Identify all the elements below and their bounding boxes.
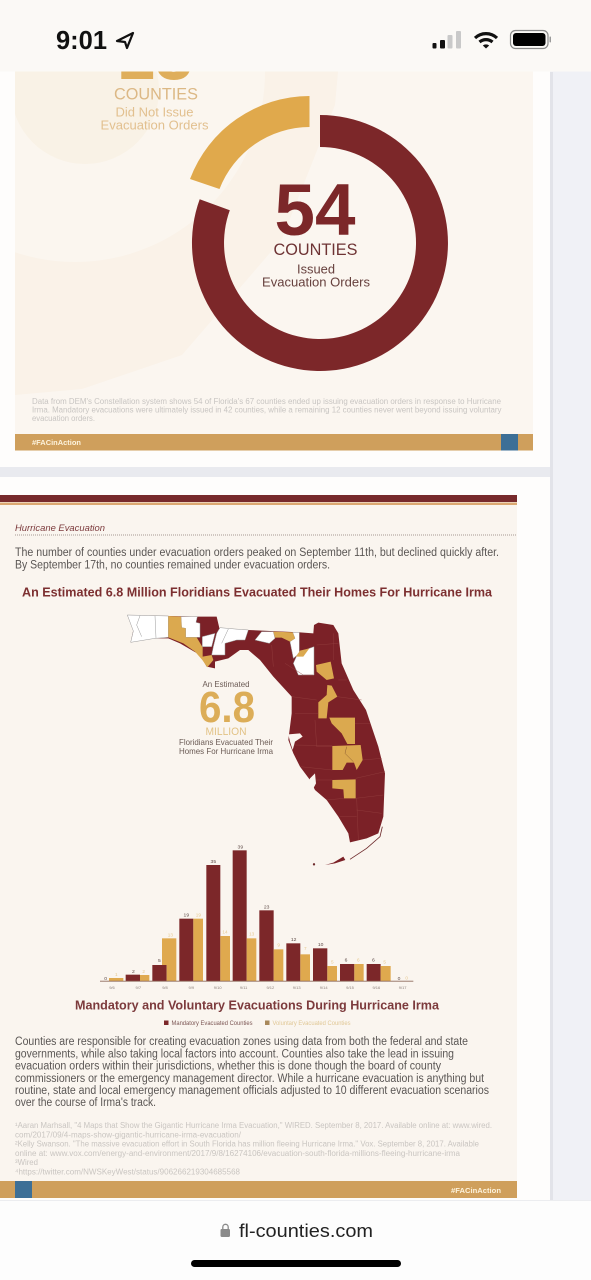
bar chart: evacuated counties by day: 14: [222, 930, 228, 935]
text block: footnotes: com/2017/09/4-maps-show-gigantic-hurricane-irma-evacuation/: [15, 1130, 242, 1140]
bar chart: evacuated counties by day: 39: [238, 844, 243, 850]
statistic: 54 counties issued: Evacuation Orders: [262, 276, 370, 290]
bar chart: evacuated counties by day: 9/16: [372, 985, 381, 990]
callout: 6.8 million evacuated: [179, 679, 273, 756]
chart legend: Voluntary Evacuated Counties: [272, 1021, 350, 1027]
panel: counties issuing evacuation orders: [0, 72, 550, 467]
text block: footnotes: [15, 1121, 492, 1176]
icon: signal bars: [432, 31, 461, 48]
bar chart: evacuated counties by day: 23: [264, 905, 270, 911]
bar chart: evacuated counties by day: 6: [357, 958, 360, 963]
icon: wifi: [475, 34, 497, 48]
heading: chart title: Mandatory and Voluntary Evacuations During Hurricane Irma: [75, 998, 440, 1012]
footer band: #FACinAction: [451, 1186, 501, 1195]
heading: map title: An Estimated 6.8 Million Floridians Evacuated Their Homes For Hurricane Irma: [22, 584, 493, 600]
bar chart: evacuated counties by day: 35: [211, 859, 216, 865]
browser status bar: [0, 0, 591, 72]
bar chart: evacuated counties by day: 1: [115, 972, 118, 977]
footer band: [0, 1181, 517, 1198]
donut segment: 54 counties issued: [192, 115, 448, 371]
bar chart: evacuated counties by day: 13: [168, 932, 173, 937]
bar chart: evacuated counties by day: 7: [304, 946, 307, 951]
text block: footnotes: ²Kelly Swanson. "The massive evacuation effort in South Florida has million fleeing Hurricane Irma." Vox. September 8, 2017. Available: [15, 1140, 480, 1148]
icon: lock: [220, 1224, 230, 1237]
bar chart: evacuated counties by day: 5: [331, 959, 334, 964]
bar chart: evacuated counties by day: 19: [184, 912, 189, 918]
icon: battery: [510, 30, 551, 48]
text block: data note: evacuation orders.: [32, 414, 95, 423]
bar chart: evacuated counties by day: 9/6: [109, 985, 116, 990]
bar chart: evacuated counties by day: 9/17: [399, 985, 407, 990]
statistic: 13 counties did not issue: [100, 14, 208, 132]
bar chart: evacuated counties by day: 9/9: [189, 985, 195, 990]
text block: county responsibilities: evacuation orders within their jurisdictions, whether this is done though the board of county: [15, 1060, 441, 1072]
callout: 6.8 million evacuated: An Estimated: [202, 679, 250, 689]
browser address bar: [0, 1200, 591, 1280]
clock: 9:01: [56, 25, 107, 55]
text block: data note: [32, 397, 502, 423]
text block: footnotes: ¹Aaran Marhsall, "4 Maps that Show the Gigantic Hurricane Irma Evacuation," WIRED. September 8, 2017. Available online at: www.wired.: [15, 1121, 492, 1130]
callout: 6.8 million evacuated: 6.8: [199, 683, 255, 732]
site address: fl-counties.com: [239, 1221, 373, 1241]
text block: data note: Data from DEM's Constellation system shows 54 of Florida's 67 counties ended up issuing evacuation orders in response to Hurricane: [32, 397, 502, 406]
bar chart: evacuated counties by day: 12: [291, 937, 297, 943]
statistic: 13 counties did not issue: Evacuation Orders: [100, 118, 208, 132]
bar chart: evacuated counties by day: 9/11: [240, 985, 248, 990]
callout: 6.8 million evacuated: MILLION: [206, 726, 247, 738]
text block: county responsibilities: routine, state and local emergency management officials adjusted to 10 different evacuation scenarios: [15, 1085, 489, 1097]
text block: data note: Irma. Mandatory evacuations were ultimately issued in 42 counties, while a remaining 12 counties never went beyond issuing voluntary: [32, 406, 502, 414]
donut segment: 13 counties did not issue: [190, 96, 310, 189]
map: Florida counties: [127, 615, 385, 865]
bar chart: evacuated counties by day: [100, 844, 413, 990]
bar chart: evacuated counties by day: 9/7: [136, 985, 142, 990]
bar chart: evacuated counties by day: 0: [104, 976, 107, 982]
icon: location arrow: [117, 33, 133, 48]
text block: footnotes: ³Wired: [15, 1158, 38, 1167]
text block: footnotes: online at: www.vox.com/energy-and-environment/2017/9/8/16274106/evacuation-south-florida-millions-fleeing-hurricane-irma: [15, 1149, 461, 1158]
text block: county responsibilities: [15, 1036, 489, 1109]
bar chart: evacuated counties by day: 2: [142, 969, 145, 974]
text block: county responsibilities: commissioners or the emergency management director. While a hurricane evacuation is anything but: [15, 1073, 485, 1085]
statistic: 54 counties issued: COUNTIES: [274, 240, 358, 259]
statistic: 54 counties issued: Issued: [297, 262, 335, 276]
footer band: [15, 434, 533, 450]
intro text: By September 17th, no counties remained under evacuation orders.: [15, 560, 330, 572]
text block: county responsibilities: governments, while also taking local factors into account. Counties also take the lead in issuing: [15, 1048, 454, 1060]
bar chart: evacuated counties by day: 19: [196, 912, 201, 917]
bar chart: evacuated counties by day: 5: [383, 959, 386, 964]
bar chart: evacuated counties by day: 9/8: [162, 985, 169, 990]
statistic: 13 counties did not issue: 13: [117, 14, 193, 95]
bar chart: evacuated counties by day: 9/10: [214, 985, 222, 990]
bar chart: evacuated counties by day: 9/14: [320, 985, 328, 990]
chart legend: Mandatory Evacuated Counties: [172, 1021, 252, 1027]
bar chart: evacuated counties by day: 6: [345, 958, 348, 964]
bar chart: evacuated counties by day: 9/12: [266, 985, 275, 990]
home indicator: [191, 1260, 401, 1267]
bar chart: evacuated counties by day: 13: [249, 932, 255, 937]
bar chart: evacuated counties by day: 0: [405, 975, 408, 980]
callout: 6.8 million evacuated: Homes For Hurricane Irma: [179, 746, 273, 756]
text block: footnotes: ⁴https://twitter.com/NWSKeyWest/status/906266219304685568: [15, 1168, 241, 1176]
bar chart: evacuated counties by day: 9/13: [293, 985, 301, 990]
bar chart: evacuated counties by day: 9: [277, 943, 280, 948]
bar chart: evacuated counties by day: 2: [132, 969, 135, 975]
panel: hurricane evacuation: [0, 477, 550, 1200]
statistic: 13 counties did not issue: COUNTIES: [114, 84, 198, 104]
statistic: 54 counties issued: [262, 170, 370, 290]
section label: Hurricane Evacuation: [15, 523, 105, 533]
bar chart: evacuated counties by day: 5: [158, 958, 161, 964]
chart legend: [164, 1020, 350, 1027]
callout: 6.8 million evacuated: Floridians Evacuated Their: [179, 737, 273, 747]
statistic: 54 counties issued: 54: [274, 170, 356, 251]
bar chart: evacuated counties by day: 0: [398, 976, 401, 982]
footer band: #FACinAction: [32, 438, 81, 447]
bar chart: evacuated counties by day: 9/15: [346, 985, 355, 990]
text block: county responsibilities: over the course of Irma's track.: [15, 1097, 156, 1109]
bar chart: evacuated counties by day: 10: [318, 942, 324, 948]
intro text: [15, 547, 499, 572]
statistic: 13 counties did not issue: Did Not Issue: [116, 106, 194, 120]
intro text: The number of counties under evacuation orders peaked on September 11th, but declined quickly after.: [15, 547, 499, 559]
text block: county responsibilities: Counties are responsible for creating evacuation zones using data from both the federal and state: [15, 1036, 468, 1048]
bar chart: evacuated counties by day: 6: [372, 958, 375, 964]
